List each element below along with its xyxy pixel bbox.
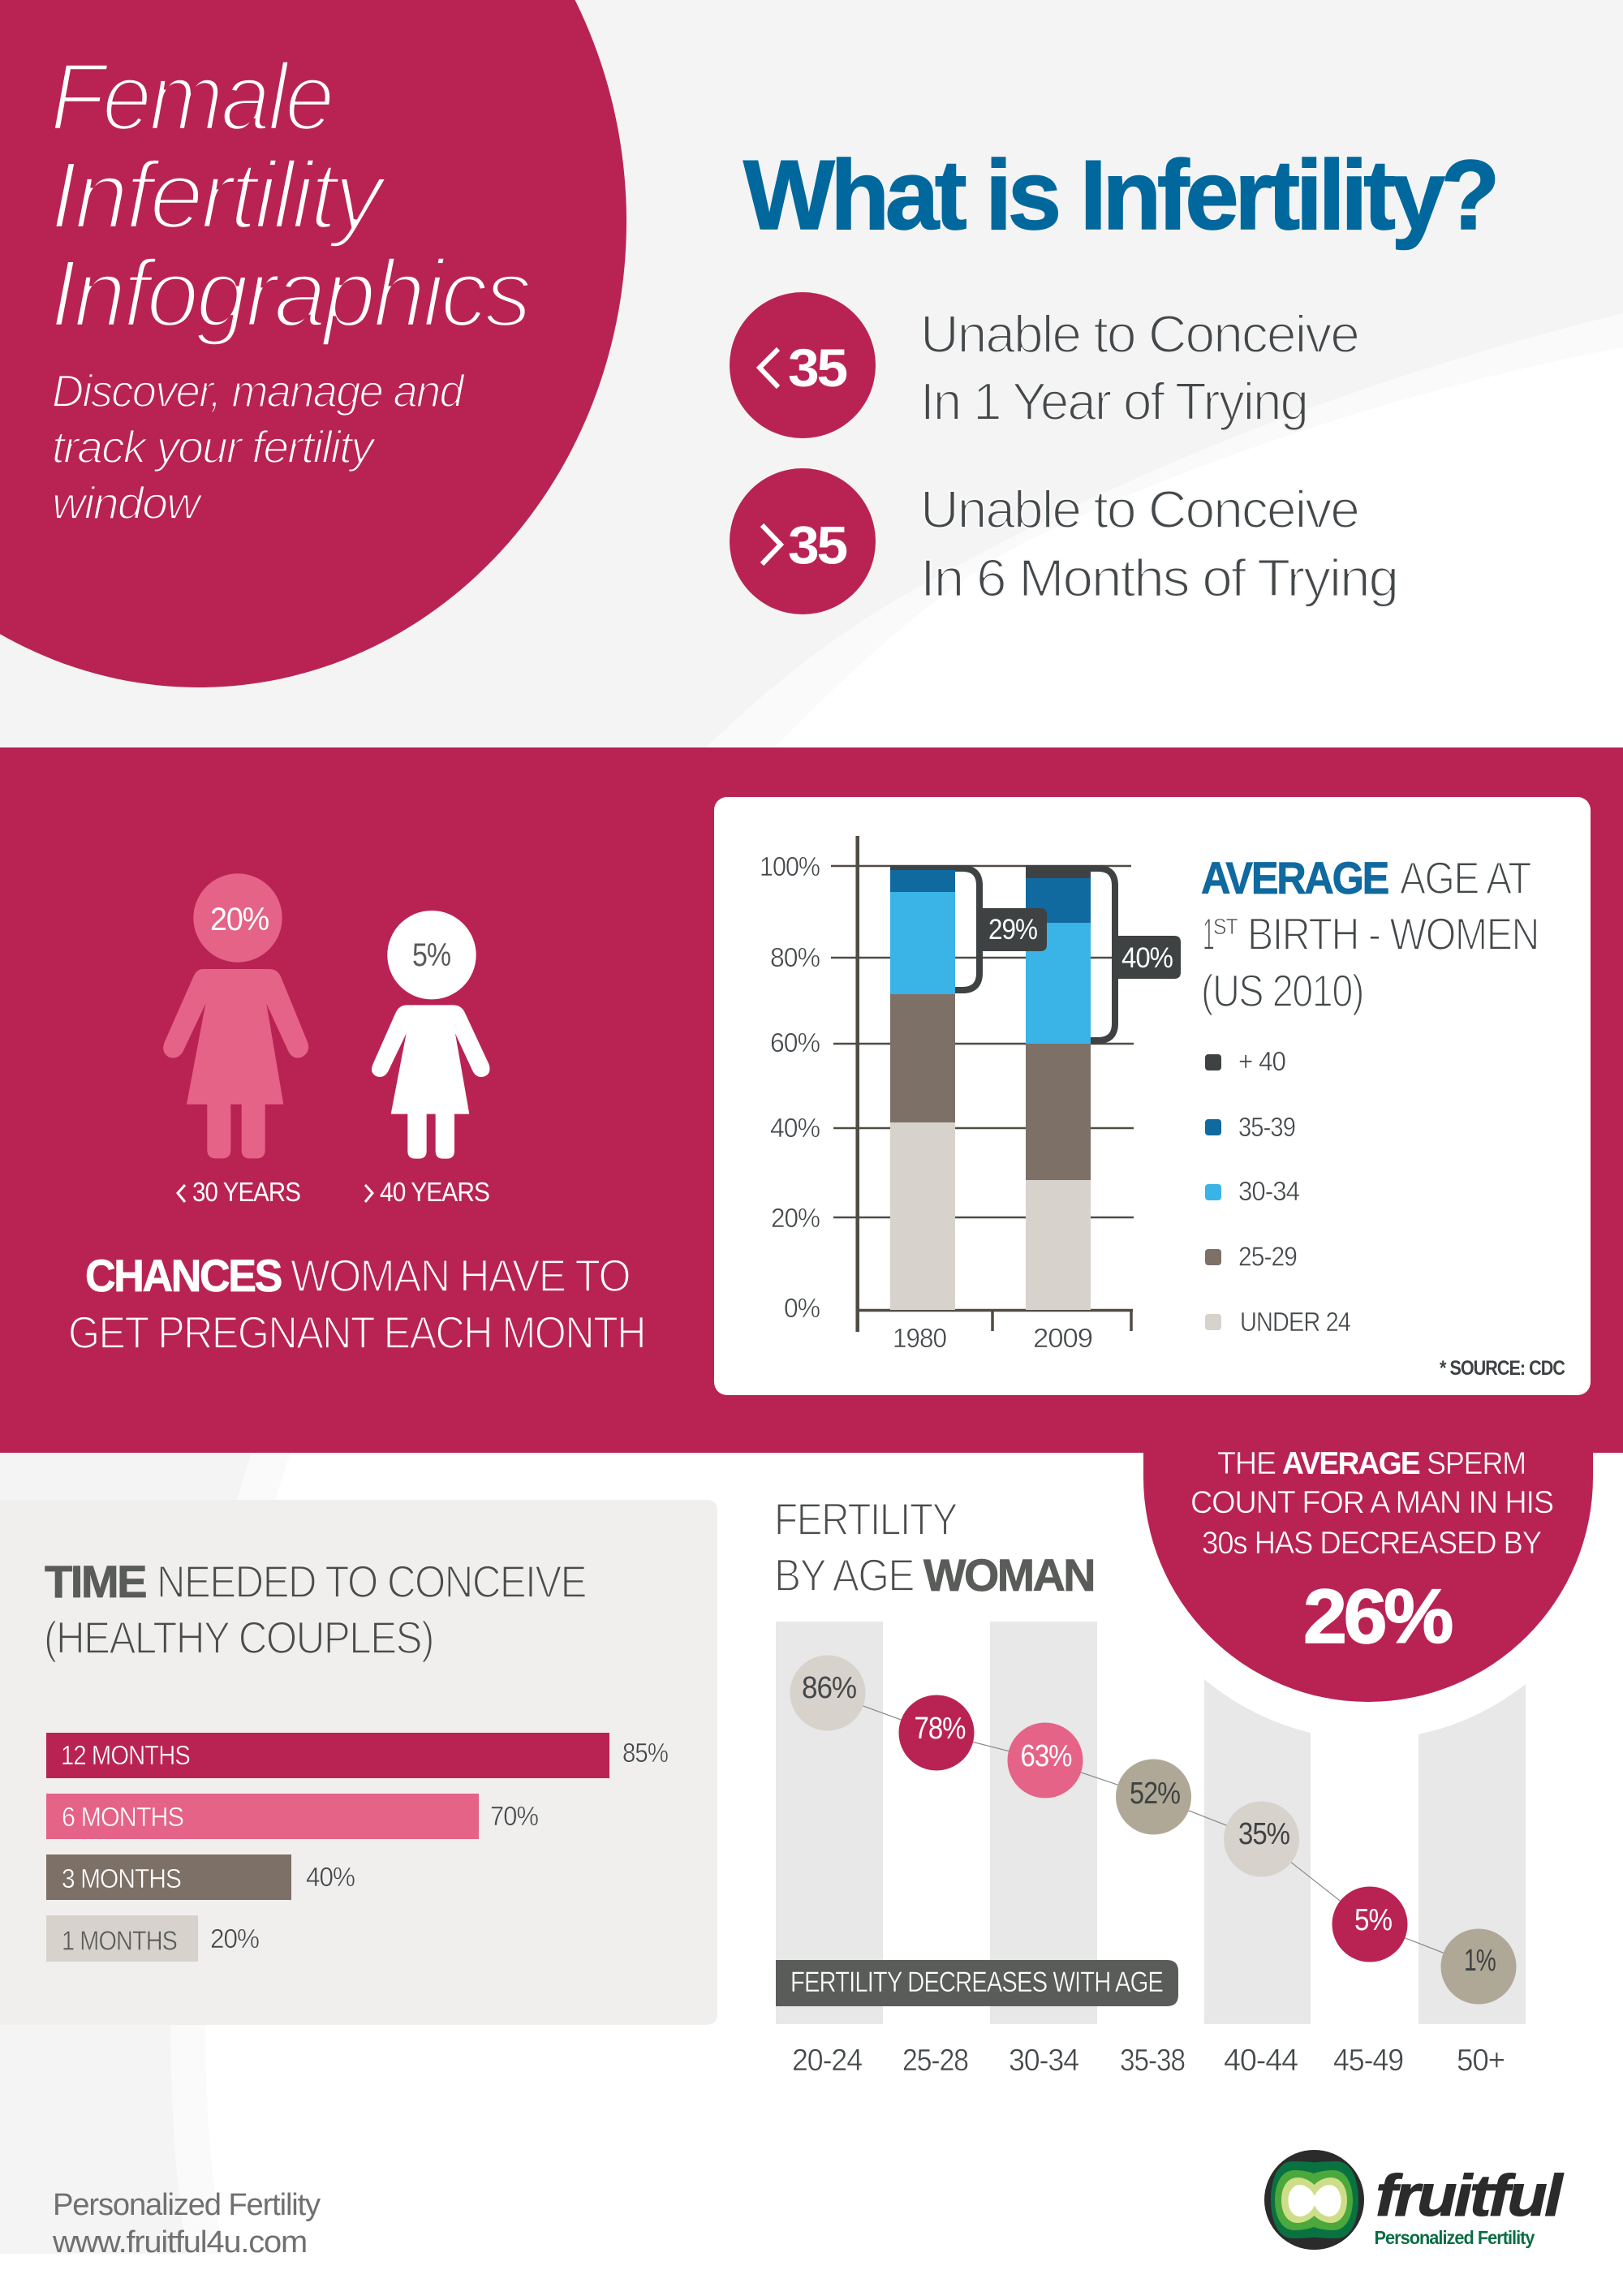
y axis labels: 0% [784, 1293, 820, 1323]
label: over 40 years: 40 YEARS [380, 1177, 489, 1207]
bracket: 29% [955, 868, 1047, 990]
age labels: 20-24 [792, 2044, 863, 2078]
text: under 35 definition: Unable to Conceive [920, 304, 1358, 364]
label: under 30 years: 30 YEARS [192, 1177, 300, 1207]
footer text [52, 2188, 321, 2259]
bubble: 30-34 63%: 63% [1021, 1739, 1072, 1773]
legend: 25-29 [1238, 1242, 1297, 1271]
logo mark [1264, 2150, 1364, 2250]
callout: sperm count: 30s HAS DECREASED BY [1202, 1526, 1542, 1561]
heading: TIME [45, 1556, 146, 1607]
bubble: 35-38 52%: 52% [1130, 1777, 1180, 1811]
chart heading: AGE AT [1400, 852, 1530, 903]
callout: sperm count: SPERM [1427, 1446, 1526, 1481]
bubble: 20-24 86% [790, 1656, 865, 1730]
title: Infertility [50, 142, 388, 249]
x axis labels: 2009 [1033, 1323, 1092, 1353]
bubble: 30-34 63% [1008, 1722, 1083, 1798]
chart heading: BIRTH - WOMEN [1247, 908, 1539, 959]
y axis labels [760, 851, 820, 1323]
heading: What is Infertility?: What is Infertility? [743, 140, 1496, 250]
bubble: 35-38 52% [1116, 1760, 1191, 1834]
icon: white woman over 40 [372, 911, 489, 1159]
panel: time needed to conceive [0, 1500, 717, 2025]
bar: 1 months: 1 MONTHS [62, 1925, 177, 1956]
subtitle: track your fertility [52, 421, 377, 472]
badge: under 35 [730, 292, 876, 438]
legend: 30-34 [1238, 1176, 1300, 1206]
age labels: 40-44 [1224, 2044, 1298, 2078]
title: Female [50, 44, 332, 151]
age labels: 50+ [1457, 2044, 1505, 2078]
heading: fertility by age woman: BY AGE [774, 1549, 914, 1600]
age labels: 35-38 [1120, 2044, 1185, 2078]
y axis labels: 40% [770, 1113, 820, 1143]
subtitle: Discover, manage and [52, 365, 465, 416]
hero circle with title [0, 0, 626, 687]
bubble: 50+ 1%: 1% [1464, 1944, 1496, 1978]
callout: sperm count: AVERAGE [1282, 1446, 1420, 1481]
text: over 35 definition [920, 480, 1397, 607]
bubble: 40-44 35%: 35% [1238, 1817, 1289, 1851]
bar: 6 months: 70% [490, 1801, 539, 1831]
bar: 2009 [1026, 865, 1091, 1310]
text: under 35 definition [920, 304, 1358, 431]
badge: over 35: 35 [788, 515, 846, 575]
y axis labels: 80% [770, 942, 820, 972]
bar: 6 months [46, 1794, 539, 1839]
chart heading: (US 2010) [1201, 965, 1363, 1016]
bar: 3 months [46, 1854, 355, 1900]
bracket: 40% [1091, 868, 1181, 1040]
heading: fertility by age woman: WOMAN [923, 1549, 1094, 1600]
footer text: www.fruitful4u.com [52, 2225, 307, 2259]
crimson band [0, 747, 1623, 1453]
text: over 35 definition: In 6 Months of Trying [920, 549, 1397, 607]
badge: over 35 [730, 468, 876, 614]
bubble: 45-49 5%: 5% [1354, 1903, 1392, 1937]
bar: 12 months: 12 MONTHS [61, 1740, 190, 1770]
bar: 1 months: 20% [210, 1923, 260, 1954]
bubble: 50+ 1% [1441, 1928, 1516, 2005]
heading: NEEDED TO CONCEIVE [157, 1556, 586, 1607]
legend: + 40 [1238, 1046, 1286, 1076]
bubble: 45-49 5% [1332, 1886, 1407, 1962]
text: under 35 definition: In 1 Year of Trying [920, 372, 1307, 431]
subtitle [52, 365, 465, 528]
y axis labels: 20% [771, 1203, 820, 1233]
x axis labels: 1980 [893, 1323, 947, 1353]
age labels: 30-34 [1009, 2044, 1079, 2078]
chart heading [1201, 852, 1539, 1016]
logo: fruitful [1264, 2150, 1565, 2250]
heading: chances: GET PREGNANT EACH MONTH [68, 1307, 645, 1358]
logo wordmark: fruitful [1375, 2164, 1565, 2229]
bar: 1980 [890, 865, 955, 1310]
bar: 1 months [46, 1915, 260, 1962]
bubble: 20-24 86%: 86% [802, 1671, 856, 1705]
chart heading: ST [1213, 914, 1238, 939]
stacked bar chart [760, 836, 1181, 1353]
icon: pink woman under 30 [163, 873, 308, 1158]
bar: 3 months: 3 MONTHS [62, 1863, 181, 1893]
bar: 3 months: 40% [306, 1862, 355, 1892]
age labels: 45-49 [1333, 2044, 1403, 2078]
callout: sperm count [1143, 1446, 1593, 1702]
legend [1205, 1046, 1351, 1337]
icon: white woman over 40: 5% [412, 937, 451, 973]
chart heading: 1 [1203, 908, 1214, 959]
footer text: Personalized Fertility [53, 2188, 321, 2222]
badge: under 35: 35 [788, 338, 846, 398]
y axis labels: 60% [770, 1027, 820, 1058]
bubble: 25-28 78% [899, 1695, 974, 1771]
pill: fertility decreases with age: FERTILITY DECREASES WITH AGE [790, 1966, 1163, 1998]
heading: fertility by age woman: FERTILITY [774, 1493, 958, 1544]
legend: 35-39 [1238, 1112, 1295, 1142]
text: over 35 definition: Unable to Conceive [920, 480, 1358, 539]
subtitle: window [52, 477, 203, 528]
bar: 12 months [46, 1733, 669, 1778]
source note: * SOURCE: CDC [1440, 1357, 1565, 1380]
chart: fertility by age [776, 1622, 1526, 2078]
bubble: 40-44 35% [1224, 1802, 1299, 1876]
age labels [792, 2044, 1505, 2078]
big number 26%: 26% [1303, 1574, 1452, 1660]
panel: average age at first birth [714, 797, 1591, 1395]
heading: chances: CHANCES [85, 1250, 282, 1301]
bar: 12 months: 85% [622, 1738, 669, 1768]
icon: pink woman under 30: 20% [210, 902, 269, 937]
bracket: 29%: 29% [988, 914, 1037, 946]
bracket: 40%: 40% [1121, 942, 1173, 974]
heading: fertility by age woman [774, 1493, 1094, 1600]
title: Infographics [50, 240, 531, 347]
callout: sperm count: COUNT FOR A MAN IN HIS [1190, 1485, 1553, 1520]
callout: sperm count: THE [1217, 1446, 1276, 1481]
legend: UNDER 24 [1240, 1307, 1351, 1337]
heading: chances [68, 1250, 645, 1358]
y axis labels: 100% [760, 851, 820, 881]
heading: (HEALTHY COUPLES) [44, 1612, 433, 1663]
heading: chances: WOMAN HAVE TO [291, 1250, 630, 1301]
bubble: 25-28 78%: 78% [914, 1712, 966, 1746]
age labels: 25-28 [902, 2044, 968, 2078]
bar: 6 months: 6 MONTHS [62, 1802, 183, 1832]
chart heading: AVERAGE [1201, 852, 1388, 903]
logo tagline: Personalized Fertility [1375, 2227, 1535, 2248]
x axis labels [893, 1323, 1092, 1353]
title [50, 44, 531, 347]
heading [44, 1556, 586, 1663]
pill: fertility decreases with age [776, 1960, 1178, 2006]
